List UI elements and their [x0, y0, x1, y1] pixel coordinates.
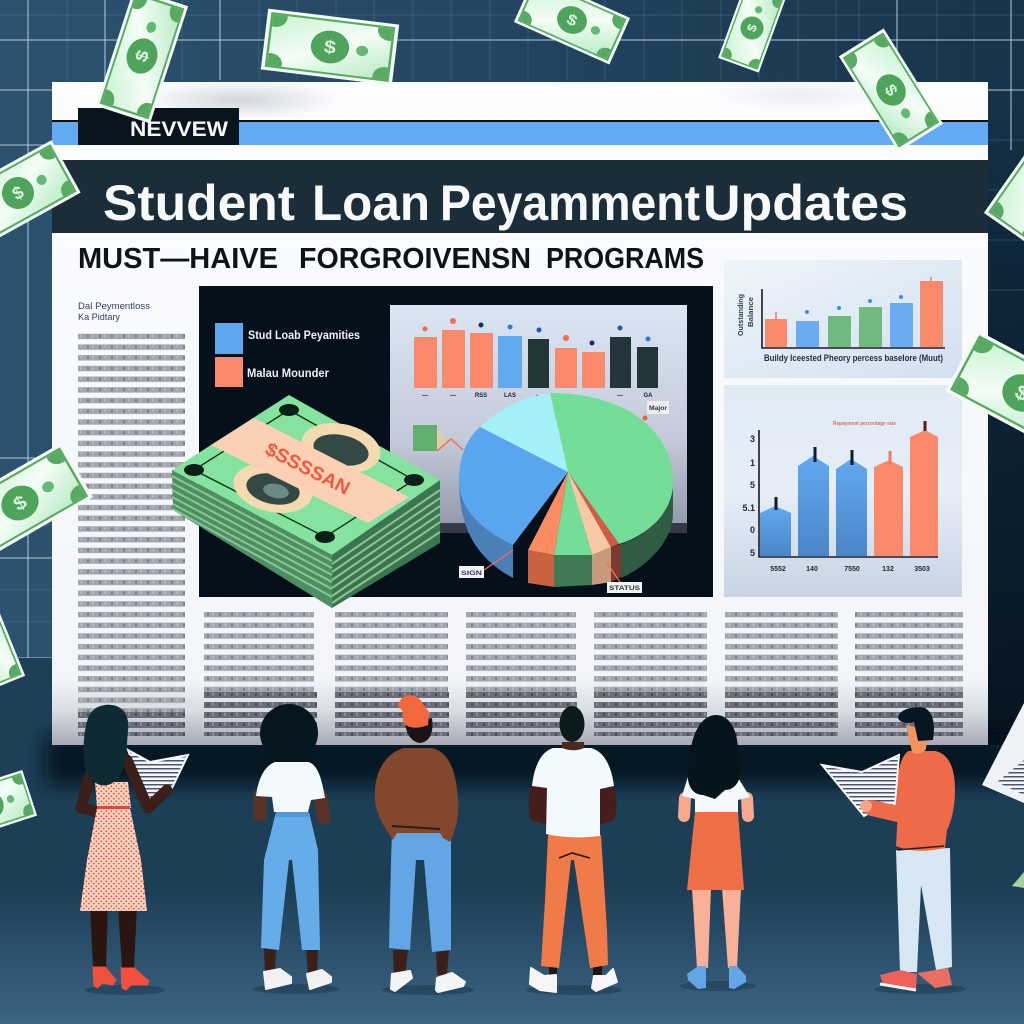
bill: left bottom: [0, 767, 40, 843]
lower text columns: [78, 612, 963, 736]
title banner: [52, 160, 988, 233]
floating newspaper page: [982, 703, 1024, 803]
bill: top right small: [715, 0, 789, 75]
inner bar chart panel: —: [617, 393, 623, 399]
masthead tab: NEVVEW: [130, 117, 229, 141]
pie callouts: [413, 401, 669, 593]
person 2: woman in white tee and blue jeans: [252, 704, 340, 994]
title banner: Updates: [703, 175, 908, 231]
bill: upper right: [835, 24, 947, 156]
open book: [128, 750, 188, 800]
title banner: Loan: [312, 175, 430, 231]
lower-right bar chart: 3503: [914, 566, 930, 573]
bill: left middle: $: [10, 492, 31, 515]
top-right bar chart: Balance: [748, 297, 755, 327]
lower-right bar chart: 0: [750, 525, 755, 535]
floor: [0, 658, 1024, 1024]
bill: upper right: $: [881, 81, 902, 100]
person 1: woman in dotted dress reading: [80, 705, 188, 995]
bill: left upper: $: [9, 182, 27, 204]
lower-right bar chart: 1: [750, 458, 755, 468]
lower-right bar chart: 7550: [844, 566, 860, 573]
lower-right bar chart: 132: [882, 566, 894, 573]
lower-right bar chart: 3: [750, 434, 755, 444]
title banner: Student: [103, 175, 295, 231]
lower-right bar chart: 5.1: [742, 503, 755, 513]
left column body text: [78, 333, 185, 713]
lower-right bar chart: 5: [750, 480, 755, 490]
person 5: woman in orange skirt: [680, 715, 756, 991]
top-right bar chart: Outstanding: [738, 294, 745, 336]
bill: top middle: [510, 0, 634, 68]
subtitle: MUST—HAIVE: [78, 243, 278, 275]
central dark chart panel: [199, 286, 713, 597]
subtitle: [78, 243, 704, 275]
inner bar chart panel: —: [422, 393, 428, 399]
title banner: Peyamment: [440, 175, 700, 231]
bill: left middle: [0, 438, 98, 568]
bill: top middle: $: [564, 11, 580, 30]
lower-right bar chart: [724, 385, 962, 597]
bill: right upper edge: [980, 119, 1024, 251]
paper band with label: $SSSSAN: [262, 439, 353, 500]
top-right bar chart: [724, 260, 962, 378]
top-right bar chart: Buildy Iceested Pheory percess baselore (Muut): [764, 353, 943, 363]
bill: right bottom corner: [1012, 872, 1024, 888]
bill: top right small: $: [744, 21, 760, 34]
subtitle: PROGRAMS: [546, 243, 704, 275]
lower-right bar chart: 5552: [770, 566, 786, 573]
inner bar chart panel: RSS: [475, 393, 487, 399]
legend: Stud Loab Peyamities: [248, 328, 360, 342]
left column heading: [78, 301, 151, 322]
lower-right bar chart: 140: [806, 566, 818, 573]
pie callouts: STATUS: [609, 586, 640, 592]
person 6: man in orange sweater reading: [822, 707, 966, 994]
open book: [822, 755, 899, 816]
bill: top centre: [257, 5, 403, 89]
subtitle: FORGROIVENSN: [299, 243, 531, 275]
pie callouts: SIGN: [461, 570, 482, 577]
pie chart: [459, 393, 673, 590]
bill: top left: $: [131, 47, 153, 64]
pie callouts: Major: [649, 406, 668, 412]
bill: left upper: [0, 136, 85, 250]
inner bar chart panel: LAS: [504, 393, 516, 399]
lower-right bar chart: 5: [750, 548, 755, 558]
bill: top left: [92, 0, 192, 127]
inner bar chart panel: [390, 305, 687, 533]
money stack: [172, 395, 440, 608]
legend: Malau Mounder: [247, 366, 329, 380]
newspaper page: [52, 79, 988, 745]
inner bar chart panel: —: [450, 393, 456, 399]
masthead tab: [52, 108, 988, 145]
background wall with grid: [0, 0, 1024, 745]
left column heading: Dal Peymentloss: [78, 301, 151, 311]
left column heading: Ka Pidtary: [78, 312, 120, 322]
legend: [215, 323, 360, 387]
person 4: man in white tee and orange trousers: [526, 706, 622, 995]
inner bar chart panel: GA: [644, 393, 653, 399]
lower-right bar chart: Repayment percentage rate: [833, 421, 896, 427]
paper band with label: [211, 418, 409, 523]
person 3: man in brown sweater and orange beanie: [375, 695, 474, 995]
bill: right middle: [940, 325, 1024, 461]
inner bar chart panel: —: [536, 393, 542, 399]
bill: left lower edge: [0, 586, 28, 698]
bill: top centre: $: [323, 37, 337, 58]
